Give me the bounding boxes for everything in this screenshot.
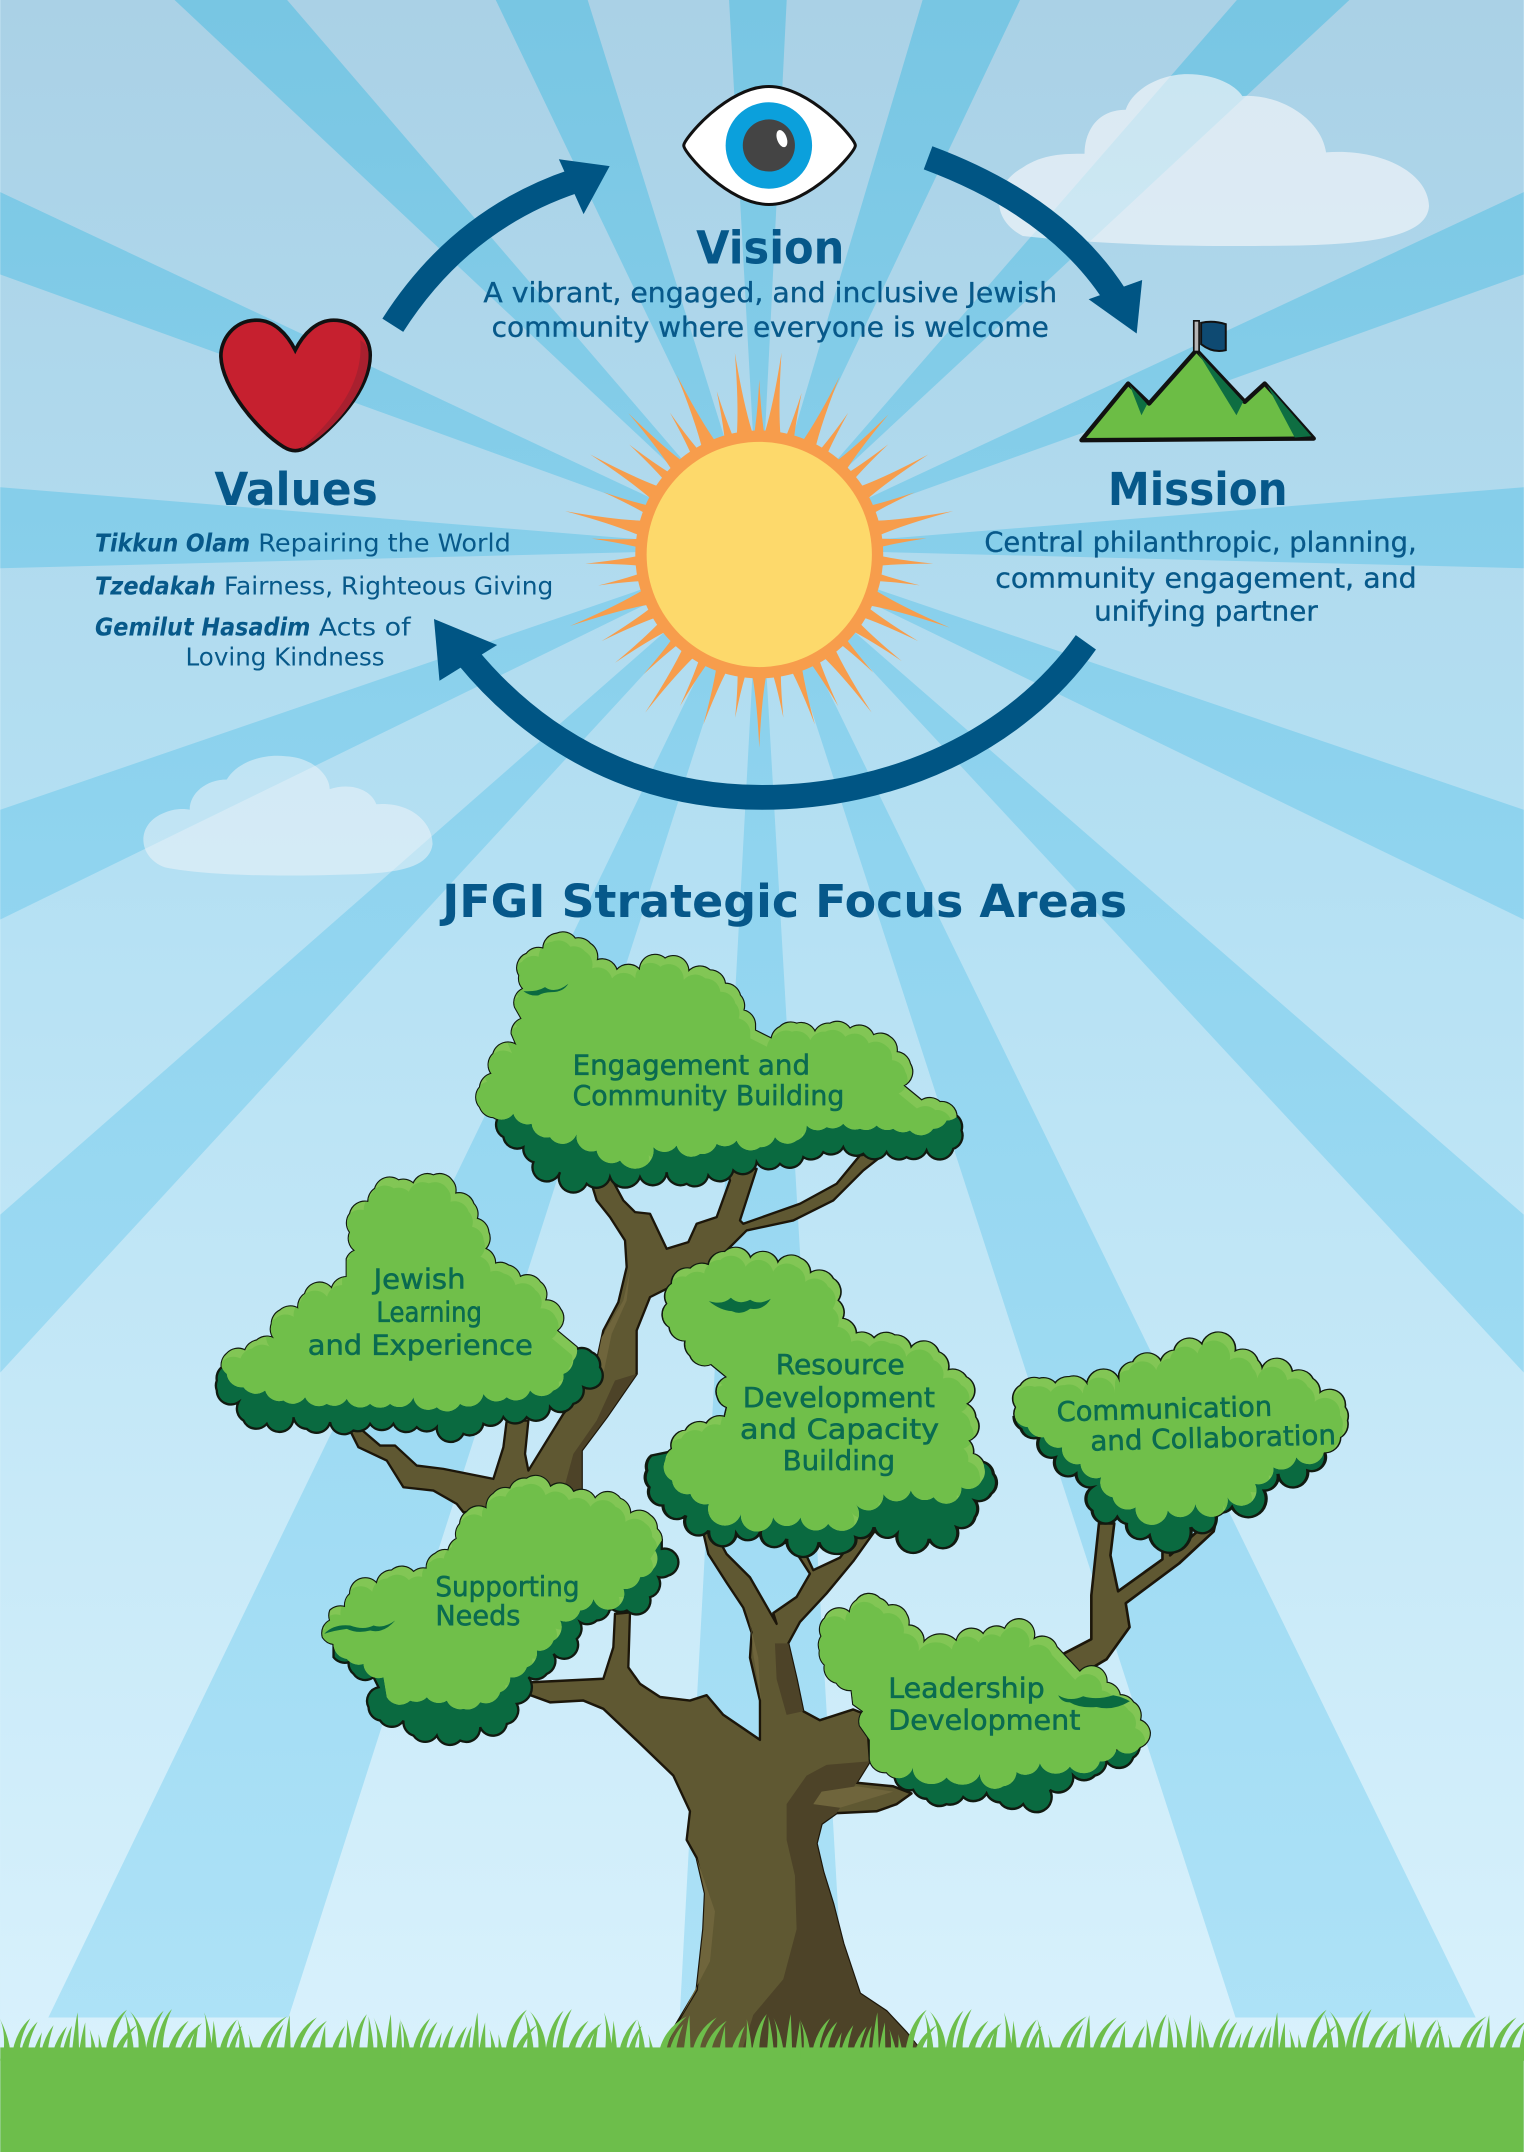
heading: Values: Values: [214, 463, 378, 516]
heading: Mission: Mission: [1108, 463, 1288, 516]
arrow: values to vision: [393, 159, 610, 325]
label: Engagement and Community Building: Engagement and: [573, 1051, 810, 1082]
label: Resource Development and Capacity Building: [740, 1350, 939, 1477]
label: Communication and Collaboration: Communication: [1056, 1392, 1272, 1428]
icon: heart: [221, 320, 370, 451]
label: Jewish Learning and Experience: Jewish: [371, 1265, 466, 1296]
label: Communication and Collaboration: and Collaboration: [1090, 1420, 1336, 1458]
text: values list: Acts of: [319, 612, 412, 641]
label: Leadership Development: [888, 1674, 1081, 1736]
label: Resource Development and Capacity Building: Development: [743, 1383, 935, 1414]
label: Engagement and Community Building: Community Building: [573, 1081, 844, 1112]
foliage: leadership development: [814, 1594, 1150, 1812]
cloud: lower left: [143, 756, 433, 876]
grass: [0, 2009, 1524, 2152]
icon: mountain with flag: [1081, 321, 1314, 440]
label: Resource Development and Capacity Building: Resource: [776, 1350, 905, 1381]
label: Engagement and Community Building: [573, 1051, 844, 1112]
label: Resource Development and Capacity Building: Building: [783, 1446, 895, 1477]
foliage: jewish learning and experience: [216, 1174, 603, 1442]
text: vision statement: [483, 278, 1057, 343]
trunk: [527, 1531, 927, 2058]
text: values list: Tikkun Olam: [95, 529, 250, 558]
icon: sun: [563, 352, 955, 748]
label: Leadership Development: Leadership: [888, 1674, 1045, 1705]
cloud: top right: [999, 74, 1429, 246]
label: Jewish Learning and Experience: [308, 1265, 533, 1362]
text: values list: Repairing the World: [258, 529, 511, 558]
foliage: supporting needs: [318, 1476, 678, 1745]
foliage: engagement and community building: [472, 932, 963, 1193]
label: Leadership Development: Development: [888, 1705, 1081, 1736]
foliage: communication and collaboration: [1009, 1333, 1347, 1553]
label: Supporting Needs: [435, 1572, 579, 1632]
text: values list: Tzedakah: [95, 571, 216, 600]
label: Jewish Learning and Experience: Learning: [376, 1298, 482, 1329]
icon: eye: [684, 86, 855, 204]
label: Supporting Needs: Supporting: [435, 1572, 579, 1603]
arrow: vision to mission: [928, 158, 1142, 334]
label: Resource Development and Capacity Building: and Capacity: [740, 1414, 939, 1445]
tree illustration: [216, 932, 1347, 2058]
text: values list: [95, 529, 553, 672]
foliage: resource development and capacity building: [645, 1248, 996, 1557]
text: mission statement: unifying partner: [1094, 596, 1319, 627]
label: Supporting Needs: Needs: [435, 1601, 520, 1632]
heading: Vision: Vision: [696, 222, 844, 275]
branches: upper limbs: [350, 1152, 887, 1512]
text: values list: Fairness, Righteous Giving: [224, 571, 553, 600]
text: values list: Loving Kindness: [186, 643, 385, 672]
title: JFGI Strategic Focus Areas: JFGI Strategic Focus Areas: [439, 875, 1127, 928]
branch: communication: [1061, 1514, 1218, 1675]
text: mission statement: Central philanthropic, planning,: [984, 528, 1417, 559]
text: mission statement: [984, 528, 1417, 627]
label: Jewish Learning and Experience: and Experience: [308, 1331, 533, 1362]
label: Communication and Collaboration: [1056, 1390, 1336, 1459]
text: vision statement: community where everyone is welcome: [492, 312, 1049, 343]
text: values list: Gemilut Hasadim: [95, 612, 310, 641]
text: mission statement: community engagement, and: [995, 563, 1417, 594]
text: vision statement: A vibrant, engaged, and inclusive Jewish: [483, 278, 1057, 309]
arrow: mission to values: [434, 619, 1086, 797]
